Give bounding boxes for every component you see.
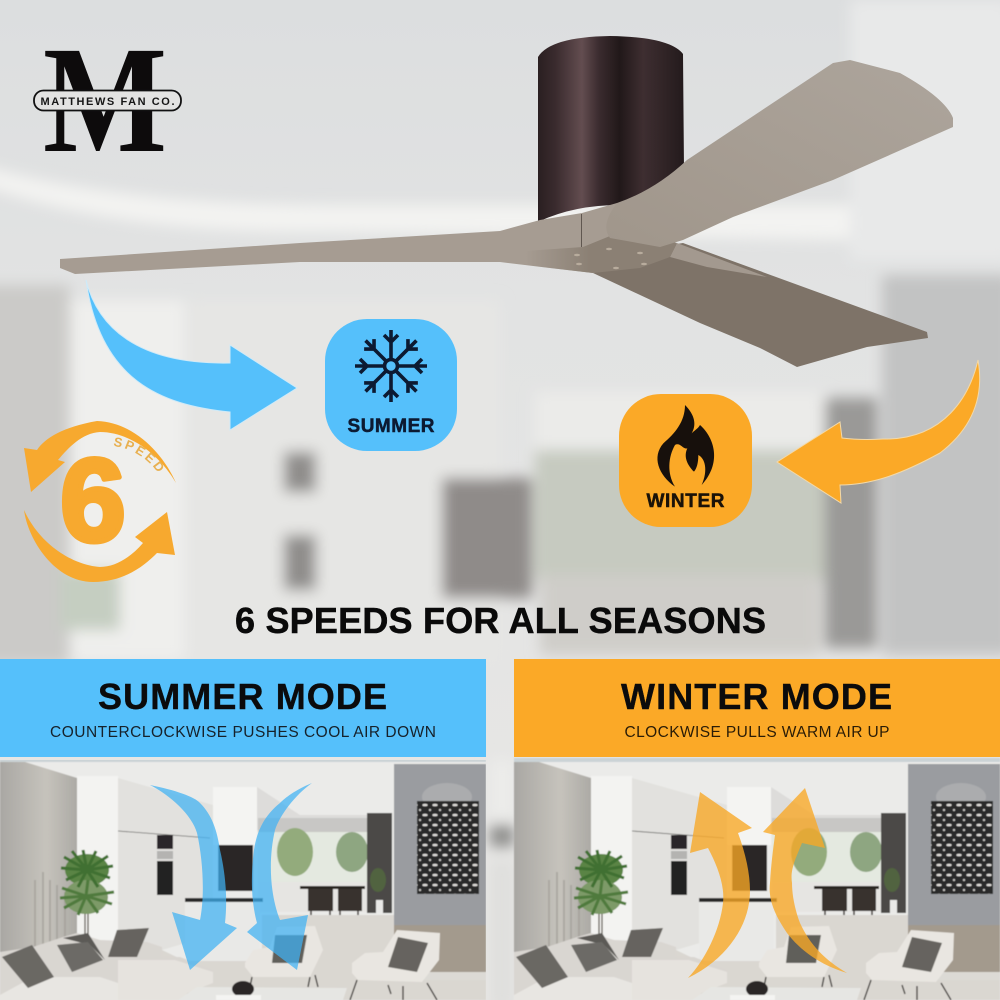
- panel: summer mode heading: [0, 659, 486, 757]
- panel: winter room photo: [514, 758, 1000, 1000]
- icon: snowflake: [355, 330, 427, 402]
- fan lower blade highlight: [670, 243, 767, 277]
- arrow: summer blue: [86, 280, 297, 430]
- panel: summer room photo: [0, 758, 486, 1000]
- icon: 6 speed badge: [24, 421, 176, 582]
- fan left blade: [60, 203, 625, 274]
- potted palm plant: [35, 850, 114, 950]
- icon: summer badge: [325, 319, 457, 451]
- summer description: COUNTERCLOCKWISE PUSHES COOL AIR DOWN: [50, 724, 436, 741]
- armchair right: [350, 930, 440, 1000]
- armchair center: [245, 926, 323, 987]
- sofa: [0, 928, 213, 1000]
- bottom circular arrow: [24, 510, 175, 582]
- arrows: summer cool air down: [150, 783, 312, 970]
- fan lower blade: [593, 243, 928, 367]
- panel: winter mode heading: [514, 659, 1000, 757]
- logo: Matthews Fan Co.: M: [43, 16, 167, 185]
- icon: winter badge: [619, 394, 752, 527]
- decorative wall panel: [417, 801, 479, 894]
- icon: flame: [657, 405, 714, 487]
- summer heading: SUMMER MODE: [98, 676, 387, 717]
- fan hub: [525, 235, 677, 273]
- winter heading: WINTER MODE: [621, 676, 892, 717]
- ceiling fan: [60, 36, 953, 367]
- title: 6 SPEEDS FOR ALL SEASONS: [235, 600, 766, 641]
- summer label: SUMMER: [348, 416, 435, 437]
- numeral 6: 6: [60, 435, 126, 567]
- top circular arrow: [24, 421, 176, 492]
- logo: Matthews Fan Co.: MATTHEWS FAN CO.: [40, 96, 174, 108]
- arrows: winter warm air up: [688, 788, 847, 978]
- winter description: CLOCKWISE PULLS WARM AIR UP: [624, 724, 890, 741]
- arrow: winter orange: [777, 360, 980, 503]
- speed label: SPEED: [114, 438, 164, 471]
- coffee table: [178, 981, 347, 1000]
- fan motor housing: [538, 36, 684, 221]
- winter label: WINTER: [646, 491, 725, 512]
- fan upper-right blade: [606, 60, 953, 247]
